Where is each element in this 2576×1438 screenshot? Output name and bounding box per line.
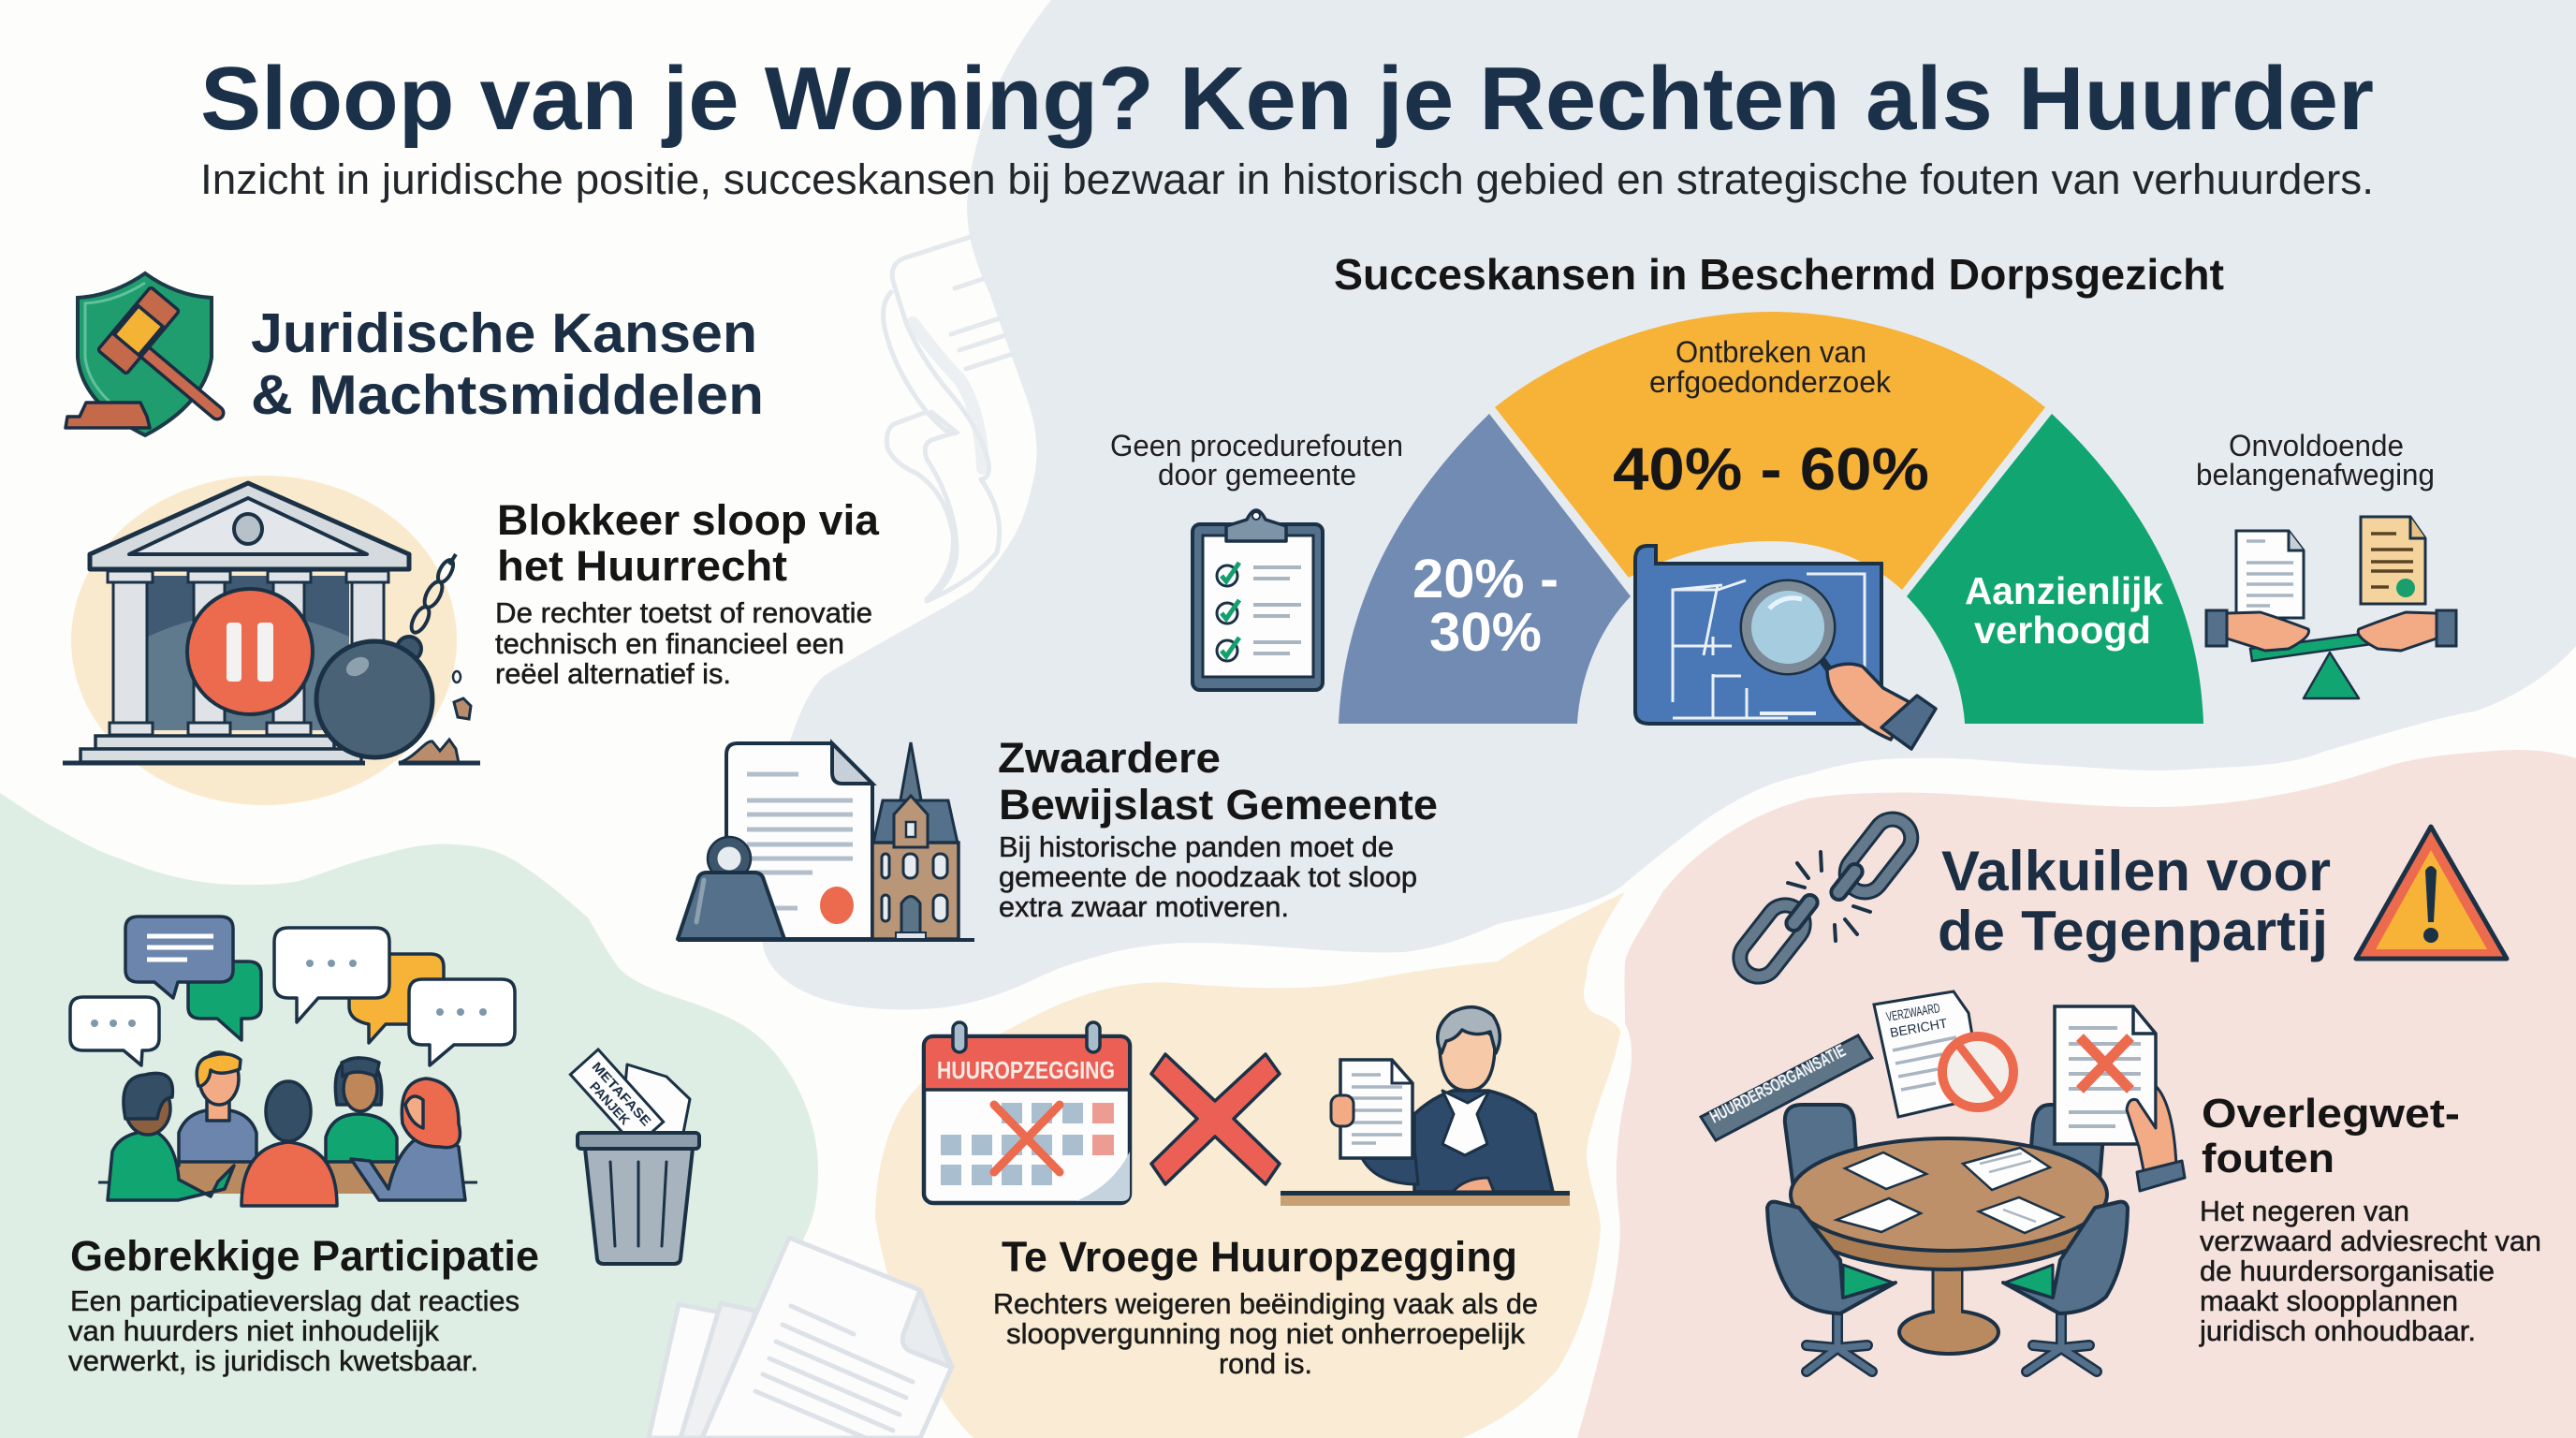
panel: te vroege huuropzegging [924,1007,1570,1380]
icon: broken chain [1733,812,1919,984]
gauge: 40-60 percent segment [1495,312,2045,590]
icon: clipboard with checks [1193,510,1323,690]
panel: valkuilen heading [1733,812,2507,984]
icon: trash bin with papers [570,1049,699,1264]
heading: juridische kansen [251,302,764,426]
icon: blueprint with magnifier and hand [1635,546,1936,749]
heading: juridische kansen: Juridische Kansen [251,302,757,364]
icon: judge with document [1281,1007,1570,1206]
text: blokkeer sloop: De rechter toetst of renovatie [495,596,872,629]
text: te vroege huuropzegging: Te Vroege Huuropzegging [1002,1233,1517,1281]
panel: zwaardere bewijslast [678,734,1438,940]
panel background: green participation blob [0,793,818,1438]
text: zwaardere bewijslast: Bij historische panden moet de [999,830,1394,863]
text: overlegwetfouten: verzwaard adviesrecht van [2200,1225,2541,1257]
icon: balance with documents [2206,517,2456,698]
gauge: 20-30 percent segment: 30% [1429,602,1542,663]
panel: overlegwetfouten [1701,991,2541,1372]
text: blokkeer sloop: technisch en financieel een [495,627,844,660]
document: verzwaard bericht with prohibition sign [1874,991,2015,1117]
text: gebrekkige participatie: Een participatieverslag dat reacties [70,1284,520,1317]
text: gebrekkige participatie: Gebrekkige Participatie [70,1232,539,1280]
icon: round table with chairs and documents [1701,991,2185,1372]
heading: valkuilen: Valkuilen voor [1941,840,2331,902]
text: overlegwetfouten [2199,1091,2541,1347]
text: gebrekkige participatie: van huurders niet inhoudelijk [68,1314,439,1347]
label: geen procedurefouten: Geen procedurefouten [1110,429,1403,462]
document: crossed out paper in hand [2055,1006,2185,1191]
heading: juridische kansen: & Machtsmiddelen [251,364,764,426]
text: blokkeer sloop: het Huurrecht [497,542,787,590]
text: blokkeer sloop [495,496,880,690]
text: overlegwetfouten: maakt sloopplannen [2200,1284,2458,1317]
icon: shield with gavel [66,273,217,435]
label: onvoldoende belangenafweging: Onvoldoende [2229,429,2404,462]
icon: weight, document and historic building [678,742,974,940]
gauge: aanzienlijk verhoogd segment: verhoogd [1974,609,2151,652]
text: gebrekkige participatie [68,1232,539,1377]
icon: trash bin with papers: METAFASE [589,1059,654,1129]
text: te vroege huuropzegging: rond is. [1219,1347,1312,1380]
text: zwaardere bewijslast: gemeente de noodzaak tot sloop [999,860,1417,893]
document: verzwaard bericht with prohibition sign: BERICHT [1889,1015,1949,1040]
text: overlegwetfouten: Overlegwet- [2202,1091,2460,1137]
panel: juridische kansen heading [66,273,764,435]
gauge: 40-60 percent segment: Ontbreken van [1676,335,1866,369]
text: te vroege huuropzegging: sloopvergunning nog niet onherroepelijk [1006,1317,1526,1350]
text: blokkeer sloop: reëel alternatief is. [495,657,731,690]
gauge: aanzienlijk verhoogd segment [1907,414,2203,724]
gauge: 40-60 percent segment: 40% - 60% [1613,435,1929,503]
document: verzwaard bericht with prohibition sign: VERZWAARD [1885,1000,1941,1024]
panel: gebrekkige participatie [68,917,699,1377]
label: onvoldoende belangenafweging: belangenafweging [2196,458,2435,492]
badge: huurdersorganisatie [1701,1035,1872,1140]
icon: court building with wrecking ball [63,476,480,805]
text: overlegwetfouten: juridisch onhoudbaar. [2199,1314,2476,1347]
label: onvoldoende belangenafweging [2196,429,2435,492]
text: zwaardere bewijslast [998,734,1438,923]
icon: large red cross [1151,1054,1280,1184]
icon: calendar crossed out [924,1022,1130,1203]
icon: warning triangle [2356,827,2507,959]
icon: calendar crossed out: HUUROPZEGGING [937,1056,1115,1084]
title: Sloop van je Woning? Ken je Rechten als Huurder [200,49,2374,149]
panel: succeskansen chart [1110,250,2456,749]
gauge: 40-60 percent segment: erfgoedonderzoek [1649,365,1892,399]
panel background: pink blob [1577,750,2576,1438]
label: geen procedurefouten [1110,429,1403,492]
icon: front chairs [1767,1202,2128,1372]
panel background: blue-grey blob [762,0,2576,1009]
heading: succeskansen: Succeskansen in Beschermd Dorpsgezicht [1334,250,2224,299]
text: zwaardere bewijslast: extra zwaar motiveren. [999,890,1289,923]
decoration: curling document watermark [884,237,1013,601]
gauge: 20-30 percent segment: 20% - [1412,549,1559,609]
decoration: paper stack watermark [649,1238,952,1438]
text: overlegwetfouten: fouten [2202,1136,2334,1181]
icon: group of people at table [98,1052,477,1206]
subtitle: Inzicht in juridische positie, succeskansen bij bezwaar in historisch gebied en strategische fouten van verhuurders. [200,155,2374,203]
heading: valkuilen [1938,840,2331,962]
badge: huurdersorganisatie: HUURDERSORGANISATIE [1707,1041,1849,1127]
panel: blokkeer sloop [63,476,880,805]
icon: trash bin with papers: PANJEK [587,1078,633,1127]
text: gebrekkige participatie: verwerkt, is juridisch kwetsbaar. [68,1344,478,1377]
text: overlegwetfouten: Het negeren van [2200,1195,2409,1227]
icon: speech bubbles [70,917,515,1065]
text: zwaardere bewijslast: Bewijslast Gemeente [999,781,1438,829]
text: te vroege huuropzegging [993,1233,1538,1380]
text: blokkeer sloop: Blokkeer sloop via [497,496,880,544]
panel background: yellow blob [875,892,1625,1438]
text: overlegwetfouten: de huurdersorganisatie [2200,1255,2495,1287]
text: te vroege huuropzegging: Rechters weigeren beëindiging vaak als de [993,1287,1538,1320]
text: zwaardere bewijslast: Zwaardere [998,734,1221,782]
gauge: aanzienlijk verhoogd segment: Aanzienlijk [1965,569,2163,612]
heading: valkuilen: de Tegenpartij [1938,900,2328,962]
label: geen procedurefouten: door gemeente [1158,458,1356,492]
gauge: 20-30 percent segment [1339,414,1631,724]
